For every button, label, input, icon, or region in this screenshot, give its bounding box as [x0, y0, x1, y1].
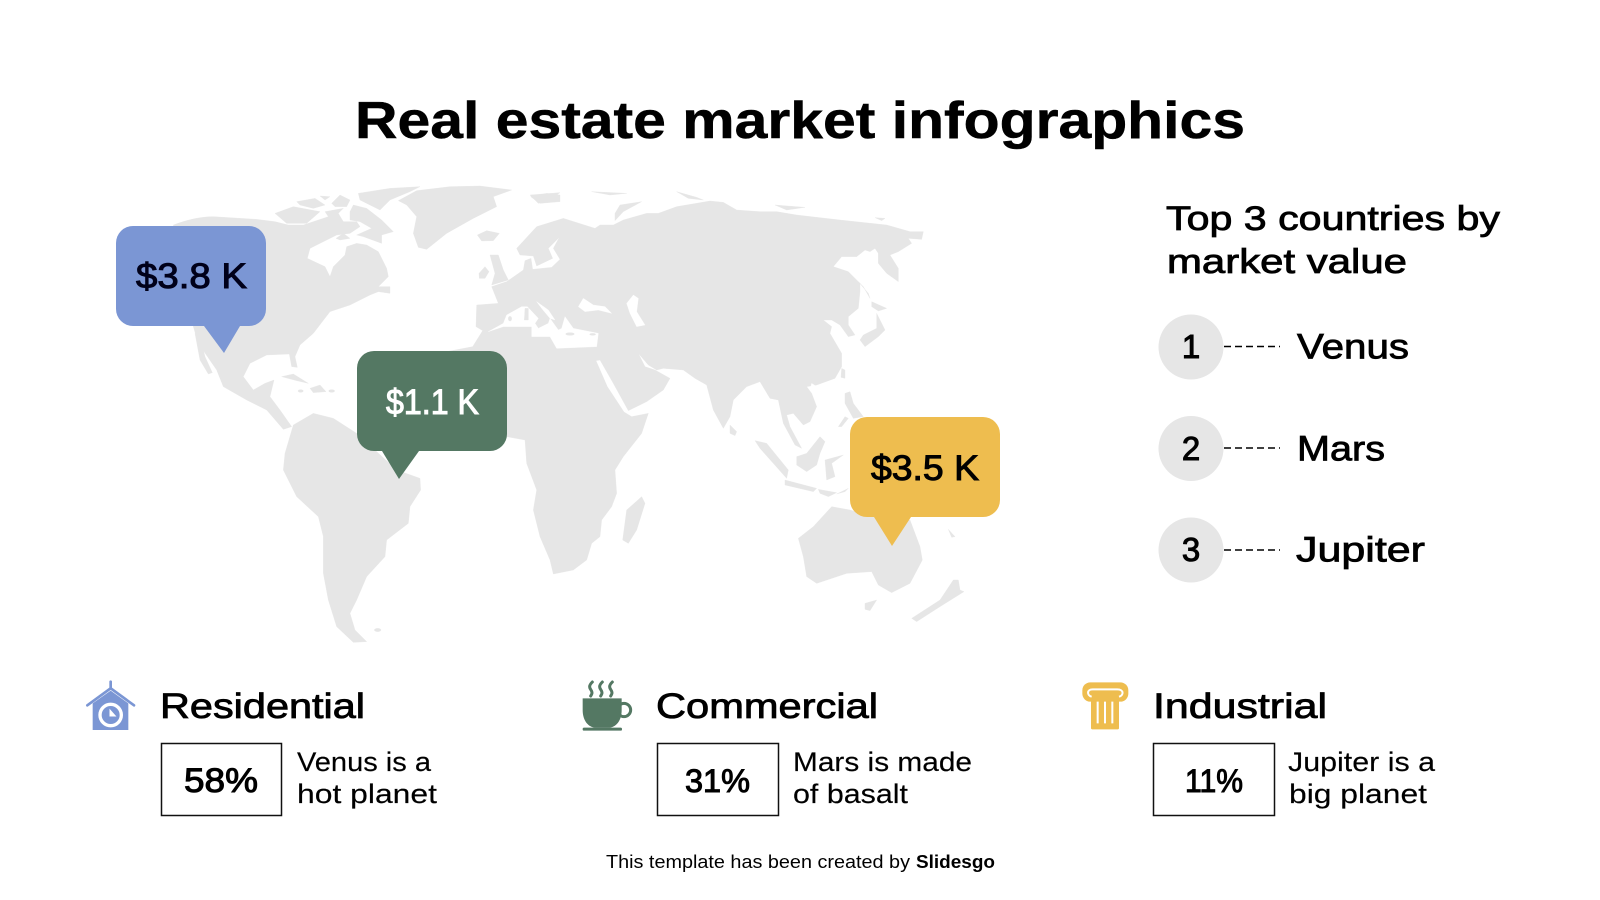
callout: $3.5 K: $3.5 K — [871, 449, 979, 488]
panel: industrial — [1082, 682, 1436, 816]
rank 3: Jupiter: 3 — [1182, 531, 1200, 568]
rank 2: Mars — [1158, 416, 1385, 481]
percent box — [1154, 744, 1274, 816]
panel: residential — [87, 682, 438, 816]
icon: house with clock — [87, 682, 134, 730]
title: Real estate market infographics — [355, 92, 1245, 150]
description: Venus is a — [297, 747, 432, 777]
percent box: 58% — [184, 762, 258, 800]
icon: coffee cup — [583, 682, 631, 731]
description: hot planet — [297, 779, 438, 809]
icon: greek column — [1082, 682, 1128, 729]
percent box: 31% — [685, 763, 750, 799]
heading: Commercial — [656, 687, 878, 726]
percent box: 11% — [1185, 763, 1243, 799]
description: Mars is made — [793, 747, 972, 777]
rank 2: Mars: 2 — [1182, 430, 1200, 467]
callout: $1.1 K: $1.1 K — [386, 383, 479, 422]
callout: $3.8 K — [116, 226, 266, 353]
rank 1: Venus — [1158, 314, 1409, 380]
callout: $3.5 K — [850, 417, 1000, 546]
description: of basalt — [793, 779, 909, 809]
callout: $1.1 K — [357, 351, 507, 479]
footer credit: Slidesgo — [916, 852, 995, 872]
panel: commercial — [583, 682, 972, 816]
ranking heading: Top 3 countries by — [1166, 200, 1500, 238]
callout: $3.8 K: $3.8 K — [136, 257, 247, 296]
rank 2: Mars: Mars — [1297, 430, 1385, 468]
rank 1: Venus: 1 — [1182, 328, 1200, 365]
heading: Residential — [160, 687, 365, 726]
rank 3: Jupiter — [1158, 518, 1425, 582]
world map — [173, 186, 964, 642]
description: big planet — [1289, 779, 1428, 809]
rank 3: Jupiter: Jupiter — [1296, 530, 1425, 570]
rank 1: Venus: Venus — [1297, 328, 1409, 366]
percent box — [658, 744, 778, 816]
footer credit: This template has been created by — [606, 852, 910, 872]
percent box — [162, 744, 282, 816]
ranking heading: market value — [1167, 243, 1407, 281]
heading: Industrial — [1153, 687, 1327, 726]
description: Jupiter is a — [1288, 747, 1436, 777]
